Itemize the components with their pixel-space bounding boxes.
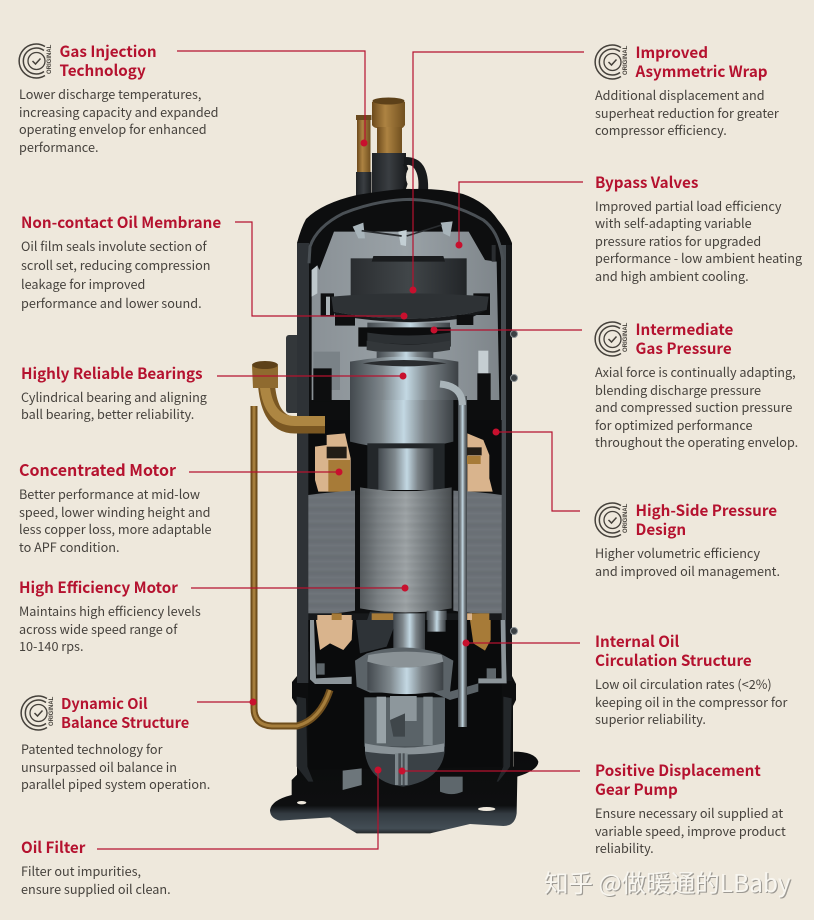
text block: and improved oil management. — [595, 561, 780, 580]
text block: performance and lower sound. — [21, 293, 202, 312]
text block: scroll set, reducing compression — [21, 255, 210, 274]
text block: unsurpassed oil balance in — [21, 757, 177, 776]
panel: positive displacement gear pump — [595, 759, 786, 857]
text block: reliability. — [595, 838, 654, 857]
text block: ball bearing, better reliability. — [21, 404, 194, 423]
heading: Gas Injection — [60, 40, 157, 62]
upper bearing cylinder — [350, 400, 453, 448]
shell body — [292, 189, 516, 785]
text block: ensure supplied oil clean. — [21, 879, 171, 898]
upper housing — [312, 232, 499, 400]
text block: across wide speed range of — [19, 619, 178, 638]
icon: original badge — [595, 322, 629, 356]
panel: highly reliable bearings — [21, 362, 207, 423]
copper winding right — [467, 433, 493, 492]
callout lines — [97, 51, 584, 849]
text block: Filter out impurities, — [21, 861, 141, 880]
heading: Gas Pressure — [636, 337, 732, 359]
text block: pressure ratios for upgraded — [595, 231, 761, 250]
text block: blending discharge pressure — [595, 380, 761, 399]
heading: Positive Displacement — [595, 759, 761, 781]
lower windings — [308, 611, 502, 652]
shell walls — [297, 243, 512, 683]
text block: for optimized performance — [595, 415, 753, 434]
lower bearing bracket — [355, 647, 478, 700]
text block: keeping oil in the compressor for — [595, 692, 788, 711]
text block: performance. — [19, 137, 98, 156]
suction elbow — [252, 361, 325, 425]
heading: Non-contact Oil Membrane — [21, 211, 221, 233]
base studs — [343, 768, 463, 794]
weld marks — [510, 330, 518, 634]
copper winding left — [315, 433, 351, 492]
shaft — [367, 443, 445, 490]
text block: with self-adapting variable — [595, 213, 752, 232]
text block: Axial force is continually adapting, — [595, 362, 796, 381]
heading: High-Side Pressure — [636, 499, 777, 521]
icon: gas injection and discharge pipes — [356, 98, 428, 200]
text block: increasing capacity and expanded — [19, 102, 218, 121]
panel: concentrated motor — [19, 457, 212, 556]
heading: Asymmetric Wrap — [634, 60, 768, 82]
motor cavity — [308, 420, 502, 495]
text block: less copper loss, more adaptable — [19, 519, 212, 538]
intermediate rings — [358, 323, 451, 368]
lower chamber — [308, 620, 507, 792]
text block: Cylindrical bearing and aligning — [21, 387, 207, 406]
text block: Improved partial load efficiency — [595, 196, 782, 215]
bypass valve assembly — [353, 221, 453, 246]
heading: Dynamic Oil — [61, 693, 148, 714]
text block: Low oil circulation rates (<2%) — [595, 674, 772, 693]
panel: non-contact oil membrane — [21, 211, 221, 312]
panel: bypass valves — [595, 171, 802, 285]
oil balance pipe — [254, 406, 330, 726]
text block: 10-140 rps. — [19, 636, 83, 655]
text block: throughout the operating envelop. — [595, 432, 798, 451]
callout dots — [250, 140, 500, 774]
heading: Balance Structure — [61, 712, 189, 733]
text block: Higher volumetric efficiency — [595, 543, 760, 562]
heading: Circulation Structure — [595, 649, 752, 671]
icon: original badge — [595, 45, 629, 79]
watermark: 知乎 @做暖通的LBaby — [544, 865, 791, 900]
shell lower walls — [297, 697, 313, 782]
stator laminations — [308, 491, 502, 614]
text block: Better performance at mid-low — [19, 484, 200, 503]
text block: speed, lower winding height and — [19, 502, 210, 521]
heading: Improved — [636, 41, 708, 63]
panel: high efficiency motor — [19, 576, 201, 655]
text block: Additional displacement and — [595, 85, 765, 104]
text block: superior reliability. — [595, 709, 706, 728]
icon: original badge — [21, 696, 55, 730]
icon: original badge — [19, 44, 53, 78]
heading: Bypass Valves — [595, 171, 698, 193]
panel: internal oil circulation structure — [595, 630, 788, 728]
watermark: 知乎 @做暖通的LBaby — [545, 866, 792, 901]
compressor cutaway illustration — [252, 98, 538, 833]
text block: and high ambient cooling. — [595, 266, 749, 285]
oil pipe — [440, 384, 467, 727]
bearing top — [350, 357, 458, 400]
base plate — [270, 752, 538, 833]
text block: variable speed, improve product — [595, 821, 786, 840]
panel: intermediate gas pressure — [595, 318, 798, 451]
panel: oil filter — [21, 836, 171, 898]
heading: Technology — [60, 59, 146, 81]
rotor — [360, 487, 452, 612]
text block: compressor efficiency. — [595, 120, 727, 139]
text block: leakage for improved — [21, 274, 145, 293]
heading: High Efficiency Motor — [19, 576, 178, 598]
heading: Design — [636, 518, 686, 540]
shell dome inner line — [309, 199, 503, 263]
heading: Oil Filter — [21, 836, 86, 858]
terminal housing behind shell — [286, 335, 300, 413]
panel: dynamic oil balance structure — [21, 693, 210, 793]
text block: Ensure necessary oil supplied at — [595, 803, 783, 822]
text block: operating envelop for enhanced — [19, 119, 207, 138]
oil filter bowl — [364, 696, 445, 787]
text block: to APF condition. — [19, 537, 120, 556]
heading: Intermediate — [636, 318, 733, 340]
text block: Maintains high efficiency levels — [19, 601, 201, 620]
text block: parallel piped system operation. — [21, 774, 210, 793]
text block: Oil film seals involute section of — [21, 236, 208, 255]
scroll set — [321, 256, 490, 326]
heading: Highly Reliable Bearings — [21, 362, 203, 384]
panel: high-side pressure design — [595, 499, 780, 580]
panel: improved asymmetric wrap — [595, 41, 779, 139]
panel: gas injection technology — [19, 40, 218, 156]
text block: performance - low ambient heating — [595, 248, 802, 267]
text block: Patented technology for — [21, 739, 163, 758]
heading: Gear Pump — [595, 778, 678, 800]
text block: and compressed suction pressure — [595, 397, 792, 416]
heading: Concentrated Motor — [19, 457, 176, 481]
side struts — [313, 352, 340, 390]
text block: Lower discharge temperatures, — [19, 84, 201, 103]
icon: original badge — [595, 503, 629, 537]
heading: Internal Oil — [595, 630, 680, 652]
text block: superheat reduction for greater — [595, 103, 779, 122]
